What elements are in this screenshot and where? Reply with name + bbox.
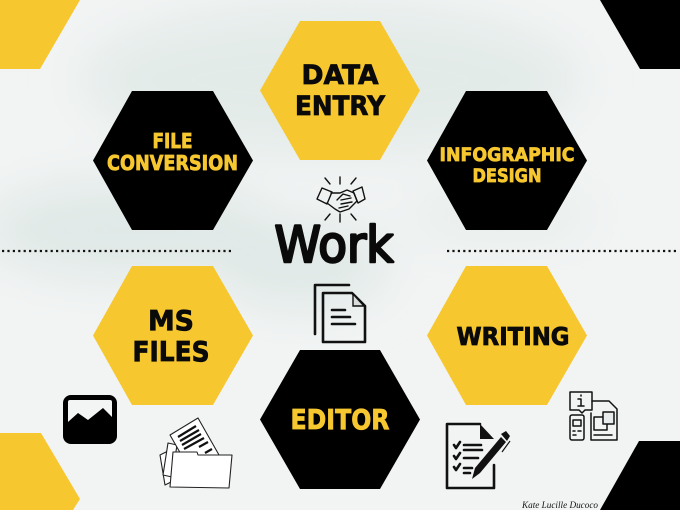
hexagon: infographic design: DESIGN	[472, 165, 542, 187]
hexagon: data entry: ENTRY	[295, 91, 385, 122]
corner: bottom right black	[600, 441, 680, 510]
hexagon: writing	[427, 266, 587, 405]
hexagon: data entry: DATA	[302, 60, 379, 91]
hexagon: editor: EDITOR	[290, 403, 390, 436]
hexagon: file conversion: CONVERSION	[107, 151, 238, 175]
icon: handshake	[317, 177, 365, 222]
icon: checklist and pen	[447, 424, 510, 488]
hexagon: file conversion	[93, 91, 253, 230]
hexagon: writing: WRITING	[456, 322, 570, 351]
heading: work: Work	[274, 216, 394, 274]
hexagon: file conversion: FILE	[152, 129, 192, 153]
hexagon: infographic design	[427, 91, 587, 230]
icon: folder with papers	[160, 418, 232, 488]
icon: image	[63, 395, 117, 444]
dotted divider left	[2, 250, 232, 252]
hexagon: infographic design: INFOGRAPHIC	[440, 144, 574, 166]
corner: top right black	[600, 0, 680, 69]
corner: top left yellow	[0, 0, 80, 69]
icon: info panels	[570, 392, 617, 440]
hexagon: editor	[260, 350, 420, 489]
icon: document	[315, 285, 365, 342]
corner: bottom left yellow	[0, 433, 80, 510]
hexagon: ms files: FILES	[132, 335, 210, 368]
hexagon: ms files: MS	[148, 304, 194, 337]
hexagon: data entry	[260, 21, 420, 160]
dotted divider right	[447, 250, 678, 252]
hexagon: ms files	[93, 266, 253, 405]
